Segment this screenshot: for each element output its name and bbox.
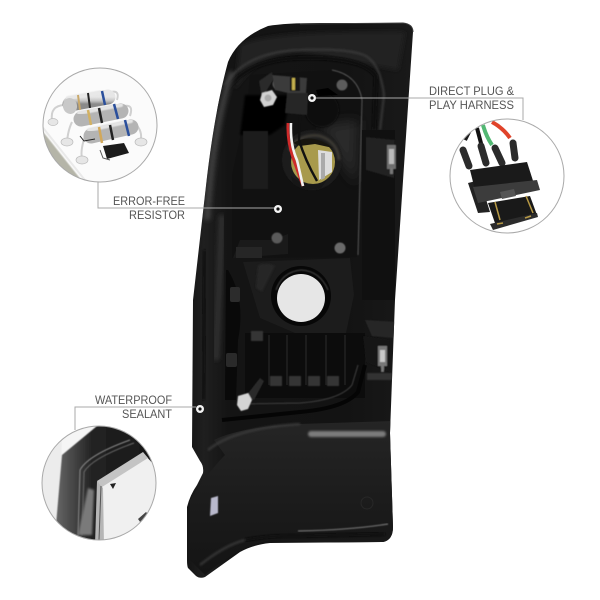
side clip lower xyxy=(363,336,390,372)
label: sealant xyxy=(95,393,173,421)
inset circle: resistor board xyxy=(42,68,158,182)
left recess xyxy=(243,131,268,189)
socket shadow disc xyxy=(306,102,339,128)
side clip upper xyxy=(366,137,396,178)
inset circle: sealant edge xyxy=(40,424,160,545)
right side dark column xyxy=(362,130,382,177)
resistor front xyxy=(89,120,131,143)
upper rim shading xyxy=(238,32,402,82)
notch above socket xyxy=(316,88,338,96)
lens opening xyxy=(271,266,331,326)
heat shrink sleeves xyxy=(463,143,515,166)
lower mount block xyxy=(233,234,288,258)
side ribs xyxy=(225,270,240,400)
leader line: sealant xyxy=(75,407,196,430)
coloured wires xyxy=(465,122,510,147)
leader line: harness xyxy=(316,98,523,120)
bulb socket opening xyxy=(282,130,342,190)
inner white panel xyxy=(146,456,152,464)
leader line: resistor xyxy=(98,180,275,208)
label: harness: PLAY HARNESS xyxy=(429,98,514,112)
connector body xyxy=(468,180,490,213)
upper-right lower-clip surround xyxy=(365,320,396,338)
label: sealant: SEALANT xyxy=(122,407,173,421)
marker dot: resistor xyxy=(274,205,282,213)
dark gasket band xyxy=(56,426,152,540)
wires xyxy=(288,117,317,186)
callout: error-free resistor xyxy=(40,65,282,222)
central black panel xyxy=(232,70,362,258)
label: harness: DIRECT PLUG & xyxy=(429,84,514,98)
marker dot: harness xyxy=(308,94,316,102)
tab row xyxy=(251,331,339,386)
molded ridge around lower section xyxy=(222,365,365,420)
hex bolt top xyxy=(259,72,277,107)
marker dot: sealant xyxy=(196,405,204,413)
leads and solder pads xyxy=(52,92,141,158)
label: resistor: ERROR-FREE xyxy=(113,194,185,208)
highlight on lower ridge xyxy=(308,431,386,437)
top-right rim xyxy=(300,23,413,32)
label: resistor: RESISTOR xyxy=(129,208,185,222)
callout: direct plug and play harness xyxy=(308,84,566,236)
label: sealant: WATERPROOF xyxy=(95,393,172,407)
inset circle: harness connector xyxy=(448,118,566,236)
chip and traces xyxy=(103,143,129,159)
housing screws xyxy=(272,78,348,254)
lower panel xyxy=(190,421,394,575)
lens recess xyxy=(243,258,354,333)
tail light housing xyxy=(180,15,420,585)
lower grid area xyxy=(360,333,365,398)
resistor back xyxy=(62,91,108,115)
product sticker xyxy=(210,496,218,516)
connector plug xyxy=(272,75,308,115)
resistor middle xyxy=(79,104,121,125)
label: harness xyxy=(429,84,514,112)
gold pins xyxy=(495,202,500,220)
hex bolt bottom xyxy=(237,378,264,411)
label: resistor xyxy=(113,194,185,222)
callout: waterproof sealant xyxy=(40,393,204,545)
